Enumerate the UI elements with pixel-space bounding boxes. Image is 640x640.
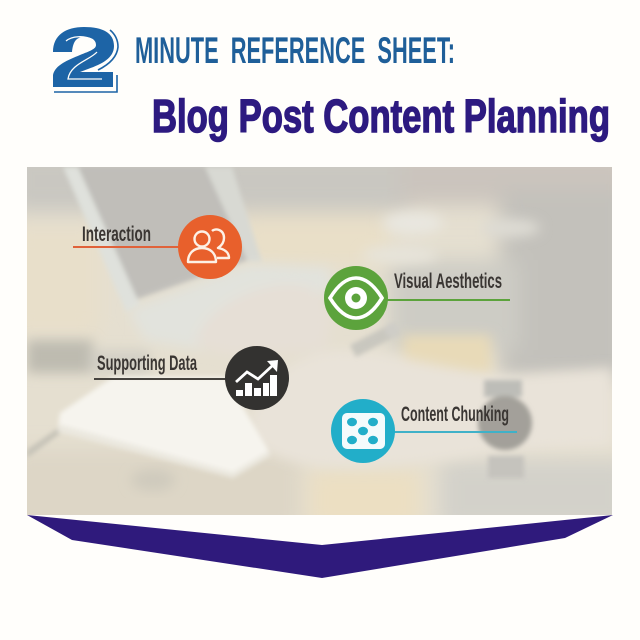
callout: visual aesthetics: Visual Aesthetics xyxy=(394,270,502,293)
callout: supporting data: Supporting Data xyxy=(97,352,197,375)
callout: content chunking: Content Chunking xyxy=(401,403,509,426)
infographic canvas xyxy=(27,27,613,578)
callout: interaction: Interaction xyxy=(82,223,151,246)
callout: interaction xyxy=(73,215,242,279)
icon: number 2 logo xyxy=(53,27,118,92)
callout: content chunking xyxy=(331,399,517,463)
callout: visual aesthetics xyxy=(324,266,510,330)
chevron banner xyxy=(27,515,613,578)
icon: growth chart xyxy=(236,360,278,396)
icon: people xyxy=(188,229,229,262)
callout: supporting data xyxy=(94,346,289,410)
icon: dice xyxy=(342,413,385,449)
background photo: desk, laptop, notebook and hands xyxy=(27,167,612,515)
icon: eye xyxy=(330,278,382,318)
